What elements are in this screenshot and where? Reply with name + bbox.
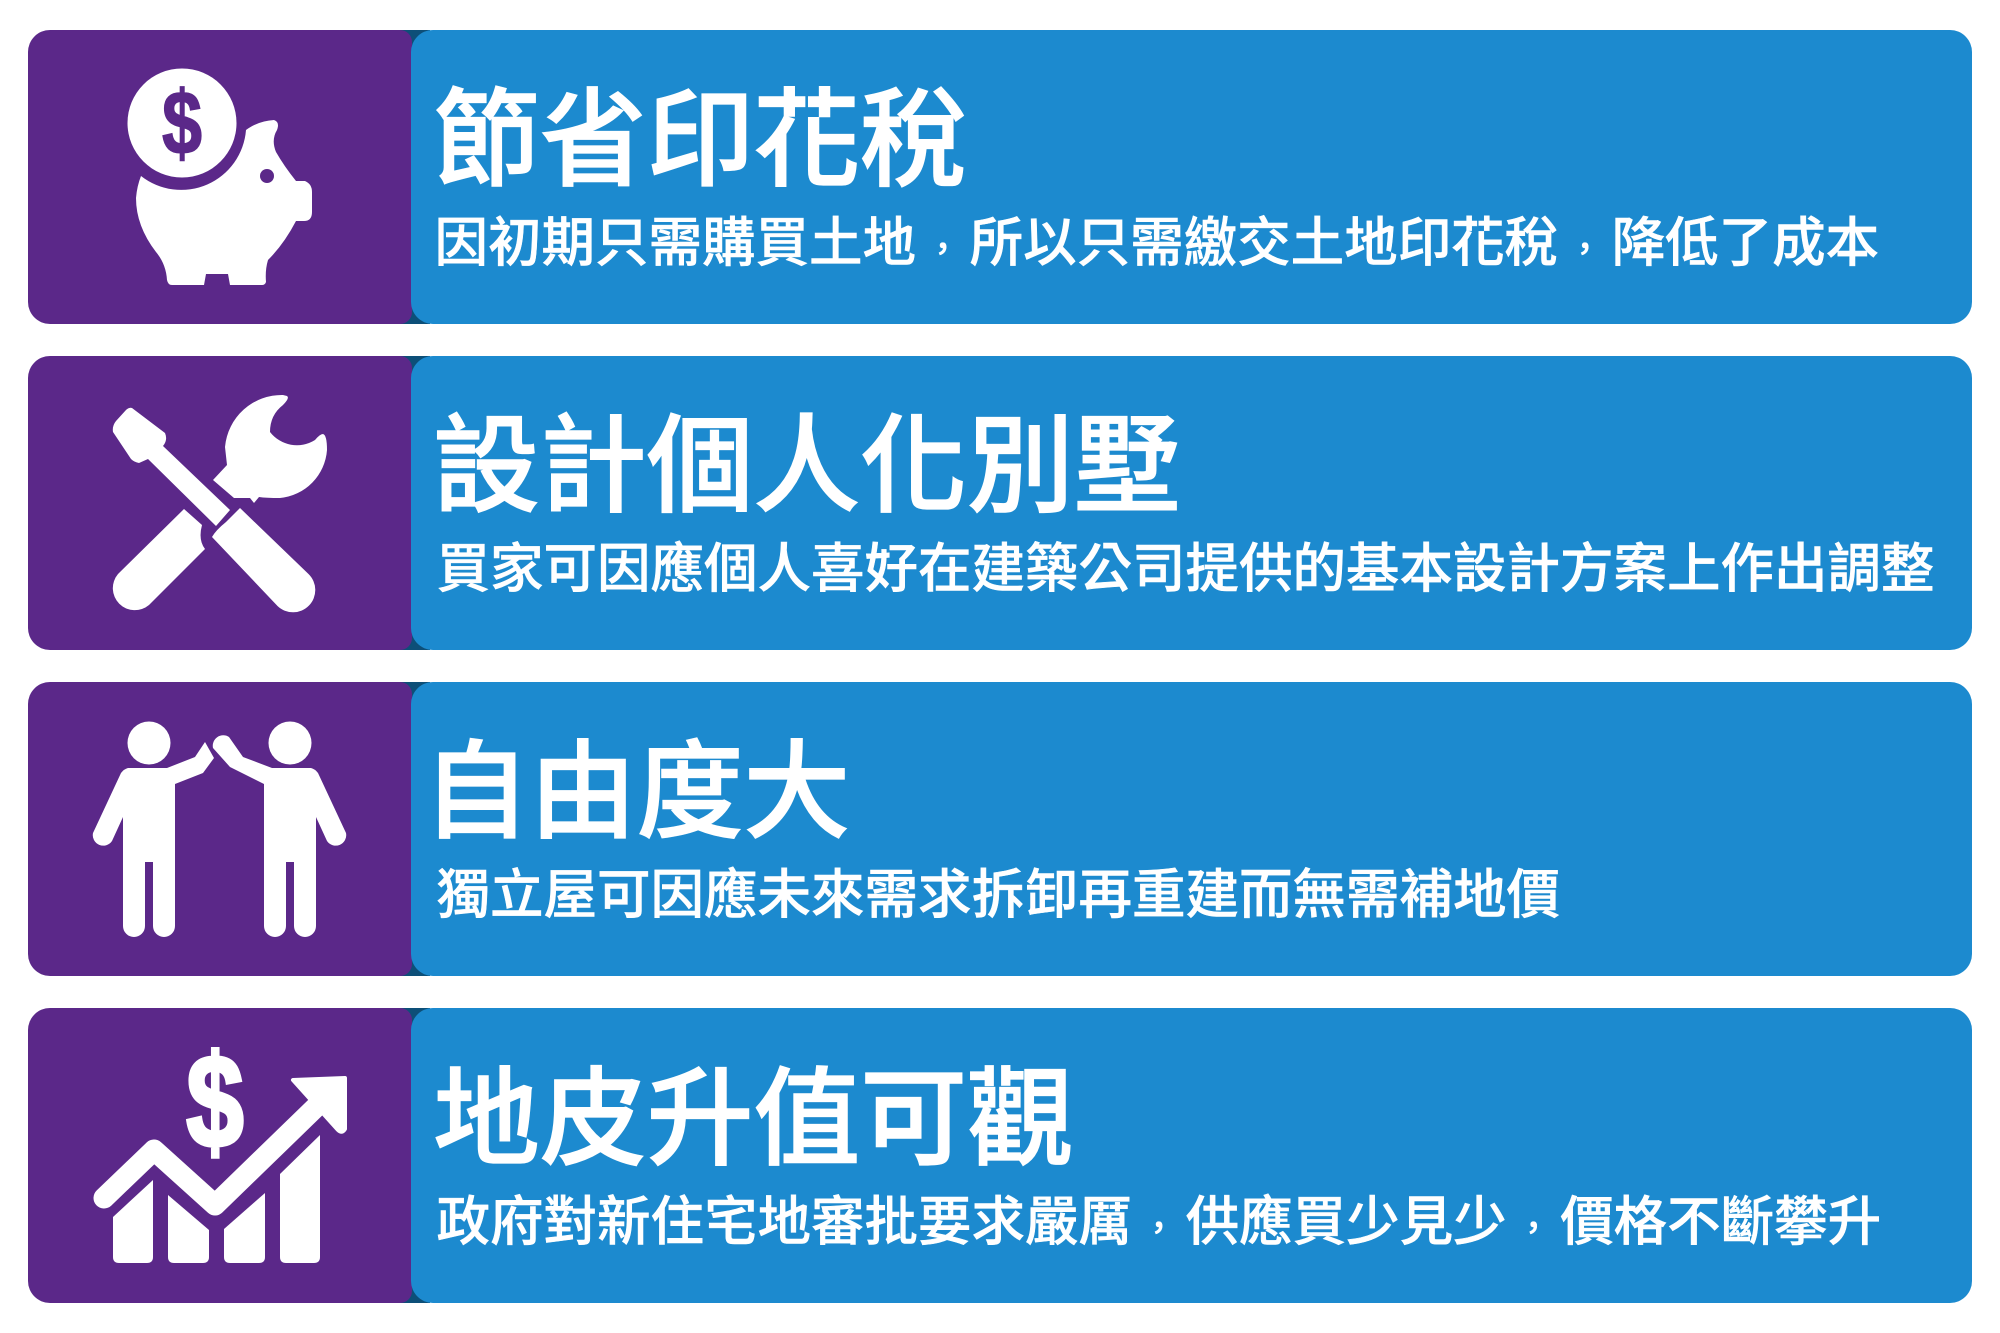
panel: row 1 purple icon block — [28, 30, 412, 324]
panel: row 2 purple icon block — [28, 356, 412, 650]
icon: rising chart with dollar — [104, 1029, 345, 1263]
text block: 因初期只需購買土地 ，所以只需繳交土地印花稅 ，降低了成本 — [434, 214, 1879, 273]
icon: crossed screwdriver and wrench — [113, 395, 327, 612]
title: 自由度大 — [423, 732, 850, 852]
text block: 買家可因應個人喜好在建築公司提供的基本設計方案上作出調整 — [436, 540, 1934, 599]
panel: row 3 freedom — [28, 682, 1972, 976]
panel: row 1 blue text block — [411, 30, 1972, 324]
icon: rising chart with dollar: $ — [186, 1029, 244, 1176]
icon: piggy bank with coin: $ — [162, 73, 202, 174]
panel: row 3 purple icon block — [28, 682, 412, 976]
title: 地皮升值可觀 — [433, 1059, 1074, 1179]
title: 節省印花稅 — [433, 80, 967, 200]
icon: piggy bank with coin — [128, 68, 312, 285]
panel: row 1 stamp duty — [28, 30, 1972, 324]
title: 設計個人化別墅 — [433, 406, 1181, 526]
panel: row 3 blue text block — [411, 682, 1972, 976]
panel: row 4 land appreciation — [28, 1008, 1972, 1303]
panel: row 4 purple icon block — [28, 1008, 412, 1303]
panel: row 2 blue text block — [411, 356, 1972, 650]
icon: two people high five — [93, 722, 346, 937]
panel: row 2 personalised design — [28, 356, 1972, 650]
panel: row 4 blue text block — [411, 1008, 1972, 1303]
text block: 政府對新住宅地審批要求嚴厲 ，供應買少見少 ，價格不斷攀升 — [436, 1193, 1881, 1252]
text block: 獨立屋可因應未來需求拆卸再重建而無需補地價 — [436, 866, 1560, 925]
